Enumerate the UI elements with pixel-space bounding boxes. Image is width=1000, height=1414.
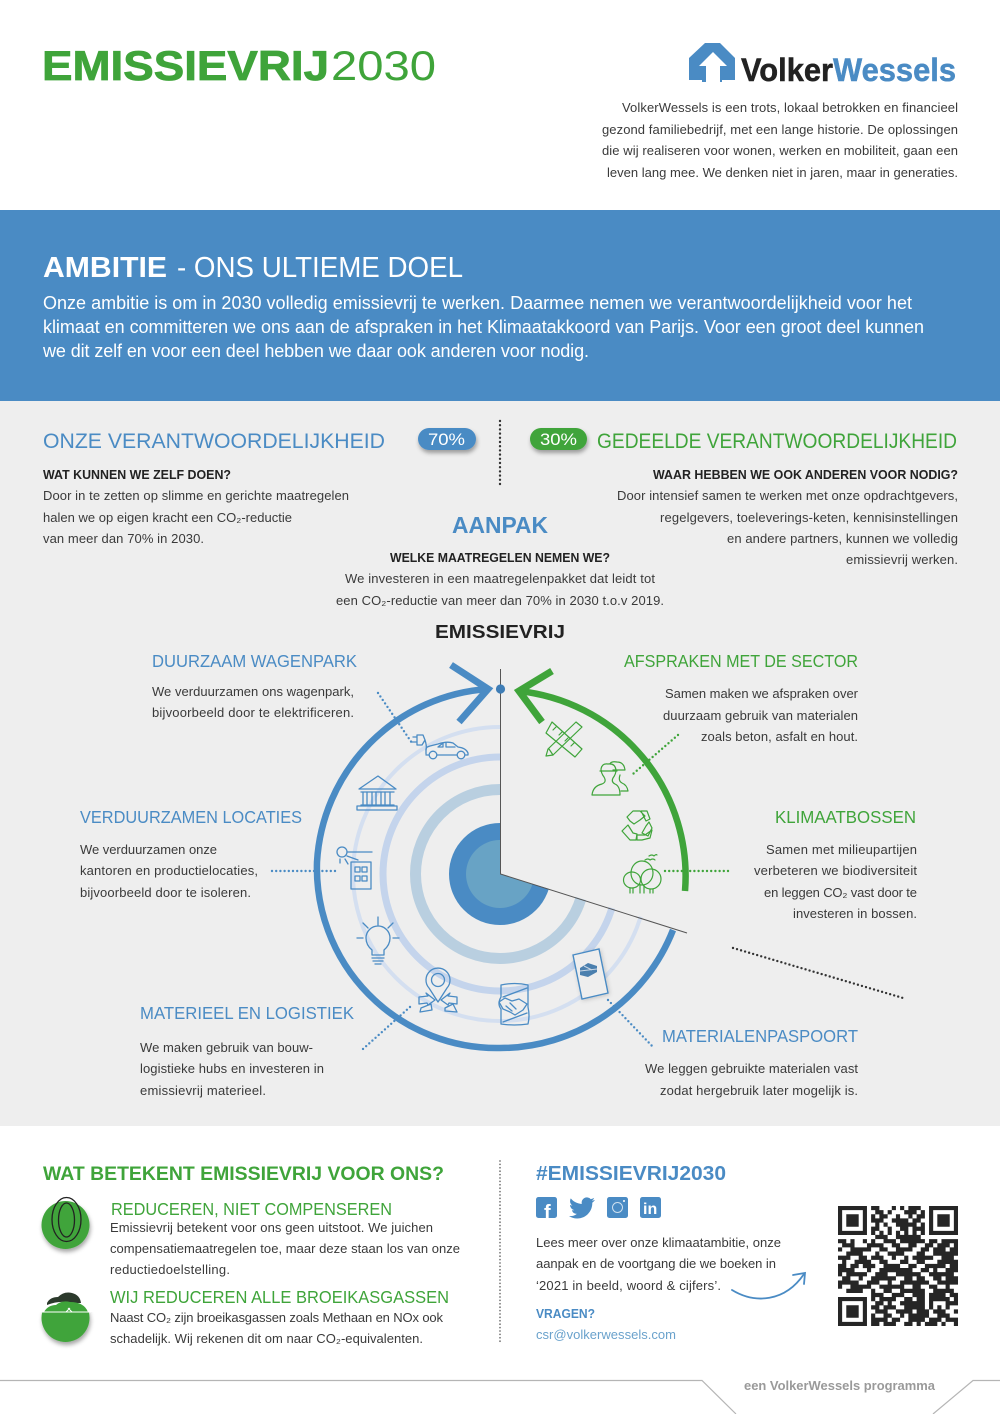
heading: hashtag: #EMISSIEVRIJ2030 bbox=[536, 1163, 726, 1185]
dotted connector lines bbox=[272, 693, 903, 1049]
footer bbox=[0, 1378, 1000, 1414]
heading: gedeelde verantwoordelijkheid: GEDEELDE VERANTWOORDELIJKHEID bbox=[597, 429, 957, 453]
panel: aanpak background bbox=[0, 401, 1000, 1126]
label: verduurzamen locaties: We verduurzamen onze bbox=[80, 842, 217, 857]
outer blue ring bbox=[317, 689, 673, 1048]
badge: 70%: 70% bbox=[428, 430, 465, 449]
icon: facebook: f bbox=[544, 1202, 551, 1224]
panel: wat betekent emissievrij bbox=[42, 1163, 460, 1346]
text: lees meer bbox=[536, 1235, 781, 1293]
logo: VolkerWessels: Wessels bbox=[833, 52, 956, 88]
heading: wat betekent emissievrij: WAT BETEKENT EMISSIEVRIJ VOOR ONS? bbox=[43, 1163, 444, 1185]
text: vragen: VRAGEN? bbox=[536, 1306, 595, 1321]
label: duurzaam wagenpark: DUURZAAM WAGENPARK bbox=[152, 651, 357, 671]
icon: workers with helmets bbox=[592, 762, 628, 795]
badge: 30% bbox=[530, 428, 587, 450]
ambitie text: klimaat en committeren we ons aan de afspraken in het Klimaatakkoord van Parijs. Voor een groot deel kunnen bbox=[43, 317, 924, 337]
panel: social and contact bbox=[536, 1163, 958, 1342]
text: reduceren niet compenseren bbox=[110, 1199, 460, 1277]
icon: tree on globe bbox=[42, 1292, 91, 1342]
label: materieel en logistiek: logistieke hubs en investeren in bbox=[140, 1061, 324, 1076]
text: lees meer: ‘2021 in beeld, woord & cijfers’. bbox=[536, 1278, 721, 1293]
text: reduceren niet compenseren: compensatiemaatregelen toe, maar deze staan los van onze bbox=[110, 1241, 460, 1256]
arrow: to QR code bbox=[732, 1273, 805, 1298]
company intro text: gezond familiebedrijf, met een lange historie. De oplossingen bbox=[602, 122, 958, 137]
ambitie text bbox=[42, 293, 924, 361]
icon: sun on building bbox=[337, 847, 372, 889]
title: EMISSIEVRIJ bbox=[42, 42, 329, 89]
text: waar hebben we ook anderen voor nodig: en andere partners, kunnen we volledig bbox=[727, 531, 958, 546]
heading: ambitie: AMBITIE bbox=[43, 252, 167, 284]
icon: instagram bbox=[607, 1197, 628, 1218]
QR code bbox=[838, 1208, 958, 1324]
label: klimaatbossen: Samen met milieupartijen bbox=[766, 842, 917, 857]
label: afspraken met de sector: Samen maken we afspraken over bbox=[665, 686, 859, 701]
heading: aanpak: AANPAK bbox=[452, 512, 548, 538]
label: duurzaam wagenpark bbox=[152, 651, 357, 720]
label: duurzaam wagenpark: We verduurzamen ons wagenpark, bbox=[152, 684, 354, 699]
heading: ambitie bbox=[43, 252, 463, 284]
icon: map pin with arrows bbox=[419, 968, 457, 1012]
label: klimaatbossen: investeren in bossen. bbox=[793, 906, 917, 921]
icon: trees bbox=[624, 855, 661, 893]
icon: zero in circle bbox=[42, 1198, 90, 1249]
label: verduurzamen locaties: bijvoorbeeld door te isoleren. bbox=[80, 885, 251, 900]
label: klimaatbossen: verbeteren we biodiversiteit bbox=[754, 863, 917, 878]
text: wij reduceren alle broeikasgassen: Naast CO₂ zijn broeikasgassen zoals Methaan en NOx ook bbox=[110, 1310, 444, 1325]
label: afspraken met de sector: duurzaam gebruik van materialen bbox=[663, 708, 858, 723]
text: reduceren niet compenseren: REDUCEREN, NIET COMPENSEREN bbox=[111, 1199, 392, 1219]
label: duurzaam wagenpark: bijvoorbeeld door te elektrificeren. bbox=[152, 705, 354, 720]
axis lines bbox=[500, 669, 687, 933]
text: wij reduceren alle broeikasgassen: schadelijk. Wij rekenen dit om naar CO₂-equivalenten. bbox=[110, 1331, 423, 1346]
label: materialenpaspoort: We leggen gebruikte materialen vast bbox=[645, 1061, 858, 1076]
label: verduurzamen locaties bbox=[80, 807, 302, 900]
header bbox=[42, 42, 958, 180]
green arc arrow bbox=[518, 671, 686, 891]
badge: 30%: 30% bbox=[540, 430, 577, 449]
heading: onze verantwoordelijkheid: ONZE VERANTWOORDELIJKHEID bbox=[43, 429, 385, 453]
label: materieel en logistiek: We maken gebruik van bouw- bbox=[140, 1040, 313, 1055]
icon: electric car bbox=[412, 735, 468, 759]
title: 2030 bbox=[331, 42, 436, 89]
title bbox=[42, 42, 436, 89]
icon: linkedin bbox=[640, 1197, 661, 1218]
label: klimaatbossen bbox=[754, 807, 917, 921]
text: wat kunnen we zelf doen: halen we op eigen kracht een CO₂-reductie bbox=[43, 510, 292, 525]
logo: VolkerWessels bbox=[689, 43, 956, 88]
label: klimaatbossen: KLIMAATBOSSEN bbox=[775, 807, 916, 827]
text: waar hebben we ook anderen voor nodig bbox=[617, 468, 958, 567]
icon: twitter bbox=[569, 1197, 595, 1218]
company intro text: die wij realiseren voor wonen, werken en mobiliteit, gaan een bbox=[602, 143, 958, 158]
label: materieel en logistiek: MATERIEEL EN LOGISTIEK bbox=[140, 1003, 354, 1023]
text: wat kunnen we zelf doen: van meer dan 70% in 2030. bbox=[43, 531, 204, 546]
text: waar hebben we ook anderen voor nodig: emissievrij werken. bbox=[846, 552, 958, 567]
text: waar hebben we ook anderen voor nodig: WAAR HEBBEN WE OOK ANDEREN VOOR NODIG? bbox=[653, 468, 958, 482]
company intro text: leven lang mee. We denken niet in jaren, maar in generaties. bbox=[607, 165, 958, 180]
label: materialenpaspoort: MATERIALENPASPOORT bbox=[662, 1026, 858, 1046]
centre dot bbox=[496, 684, 505, 694]
panel: ambitie bbox=[0, 210, 1000, 401]
label: klimaatbossen: en leggen CO₂ vast door te bbox=[764, 885, 917, 900]
heading: ambitie: - ONS ULTIEME DOEL bbox=[177, 252, 463, 284]
text: vragen: csr@volkerwessels.com bbox=[536, 1327, 676, 1342]
label: afspraken met de sector bbox=[624, 651, 859, 744]
text: waar hebben we ook anderen voor nodig: Door intensief samen te werken met onze opdrachtgevers, bbox=[617, 488, 958, 503]
inner rings bbox=[353, 727, 647, 1021]
label: materialenpaspoort: zodat hergebruik later mogelijk is. bbox=[660, 1083, 858, 1098]
text: wij reduceren alle broeikasgassen: WIJ REDUCEREN ALLE BROEIKASGASSEN bbox=[110, 1287, 449, 1307]
badge: 70% bbox=[418, 428, 476, 450]
arrow: blue bbox=[451, 665, 488, 722]
label: afspraken met de sector: AFSPRAKEN MET DE SECTOR bbox=[624, 651, 858, 671]
icon: linkedin: in bbox=[643, 1201, 657, 1218]
ambitie text: we dit zelf en voor een deel hebben we daar ook anderen voor nodig. bbox=[42, 341, 589, 361]
label: verduurzamen locaties: kantoren en productielocaties, bbox=[80, 863, 258, 878]
icon: materials passport bbox=[573, 949, 608, 999]
text: lees meer: Lees meer over onze klimaatambitie, onze bbox=[536, 1235, 781, 1250]
text: reduceren niet compenseren: Emissievrij betekent voor ons geen uitstoot. We juichen bbox=[110, 1220, 433, 1235]
text: wij reduceren alle broeikasgassen bbox=[110, 1287, 449, 1346]
text: welke maatregelen: een CO₂-reductie van meer dan 70% in 2030 t.o.v 2019. bbox=[336, 593, 664, 608]
icon: facebook bbox=[536, 1197, 557, 1224]
text: welke maatregelen: WELKE MAATREGELEN NEMEN WE? bbox=[390, 551, 610, 565]
label: verduurzamen locaties: VERDUURZAMEN LOCATIES bbox=[80, 807, 302, 827]
company intro text bbox=[602, 100, 958, 180]
label: afspraken met de sector: zoals beton, asfalt en hout. bbox=[701, 729, 858, 744]
logo: VolkerWessels: Volker bbox=[741, 52, 833, 88]
footer text: een VolkerWessels programma bbox=[744, 1378, 936, 1393]
icon: recycling bbox=[622, 811, 652, 840]
icon: building with columns bbox=[357, 776, 397, 810]
icon: light bulb bbox=[357, 917, 399, 964]
text: wat kunnen we zelf doen bbox=[43, 468, 349, 546]
text: welke maatregelen bbox=[336, 551, 664, 608]
text: reduceren niet compenseren: reductiedoelstelling. bbox=[110, 1262, 230, 1277]
text: waar hebben we ook anderen voor nodig: regelgevers, toeleverings-keten, kennisinstellingen bbox=[660, 510, 958, 525]
text: vragen bbox=[536, 1306, 676, 1342]
label: materieel en logistiek: emissievrij materieel. bbox=[140, 1083, 266, 1098]
panel: aanpak bbox=[336, 512, 664, 608]
text: welke maatregelen: We investeren in een maatregelenpakket dat leidt tot bbox=[345, 571, 655, 586]
text: wat kunnen we zelf doen: Door in te zetten op slimme en gerichte maatregelen bbox=[43, 488, 349, 503]
panel: onze verantwoordelijkheid bbox=[43, 428, 476, 546]
label: materieel en logistiek bbox=[140, 1003, 354, 1098]
icon: handshake bag bbox=[499, 984, 529, 1025]
label: materialenpaspoort bbox=[645, 1026, 858, 1098]
ambitie text: Onze ambitie is om in 2030 volledig emissievrij te werken. Daarmee nemen we verantwoordelijkheid voor het bbox=[43, 293, 912, 313]
open wedge bbox=[500, 640, 760, 953]
text: wat kunnen we zelf doen: WAT KUNNEN WE ZELF DOEN? bbox=[43, 468, 231, 482]
text: lees meer: aanpak en de voortgang die we boeken in bbox=[536, 1256, 776, 1271]
panel: gedeelde verantwoordelijkheid bbox=[530, 428, 958, 567]
radial chart bbox=[317, 640, 760, 1048]
company intro text: VolkerWessels is een trots, lokaal betrokken en financieel bbox=[622, 100, 958, 115]
icon: ruler and pencil bbox=[546, 722, 582, 757]
heading: emissievrij: EMISSIEVRIJ bbox=[435, 622, 565, 642]
